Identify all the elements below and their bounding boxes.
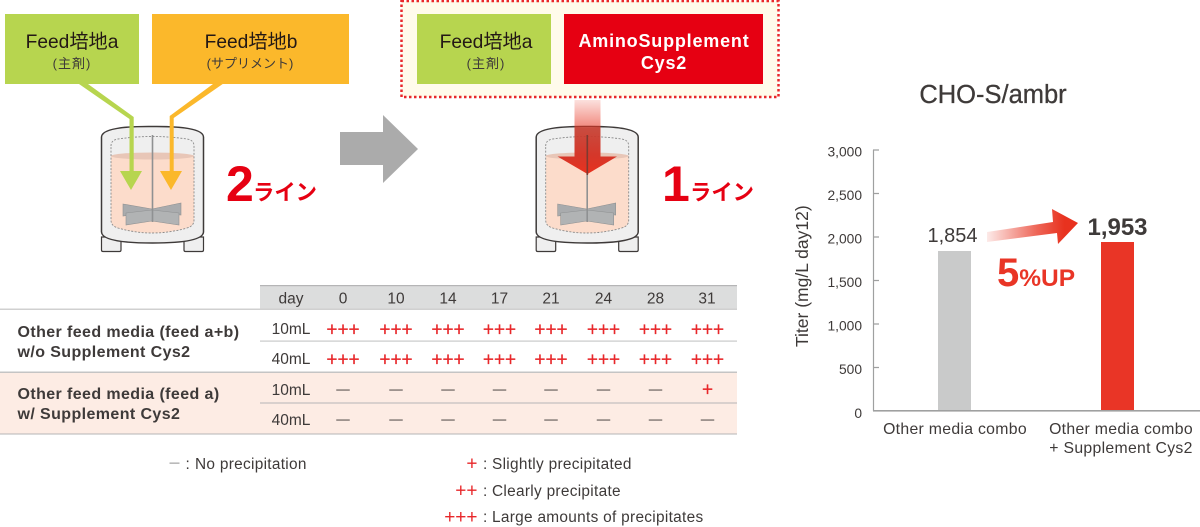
y axis title: Titer (mg/L day12) xyxy=(792,205,812,347)
callout: 5% up: 5%UP xyxy=(997,251,1075,295)
y axis: 1,000 xyxy=(827,318,862,334)
arrow: feed b into tank xyxy=(160,84,223,190)
arrow: increase xyxy=(987,209,1078,244)
row: 40mL with supplement: — xyxy=(336,412,350,426)
legend: slight: : xyxy=(483,456,488,473)
row label: with supplement: w/ Supplement Cys2 xyxy=(16,406,180,423)
table header: 24 xyxy=(595,290,612,308)
row: 40mL with supplement: 40mL xyxy=(272,412,311,429)
box: Feed medium a: Feed培地a xyxy=(440,31,533,53)
x axis xyxy=(873,410,1200,412)
table header: 28 xyxy=(647,290,664,308)
label: 1 line xyxy=(662,156,754,212)
row: 10mL with supplement: + xyxy=(702,380,713,400)
box: Feed medium a: (主剤) xyxy=(53,56,91,71)
row: 40mL with supplement: — xyxy=(597,412,611,426)
row: 10mL with supplement: 10mL xyxy=(272,382,311,399)
bar: other media combo xyxy=(927,225,978,411)
label: 1 line: 1 xyxy=(662,156,690,212)
row label: without supplement: Other feed media (feed a+b) xyxy=(18,324,239,341)
row: 10mL without supplement xyxy=(272,320,724,340)
row: 40mL without supplement xyxy=(272,350,724,370)
row: 40mL without supplement: +++ xyxy=(483,350,516,370)
row: 10mL without supplement: 10mL xyxy=(272,321,311,338)
box: Feed medium a: Feed培地a xyxy=(26,31,119,53)
table header xyxy=(260,285,737,309)
row: 10mL with supplement: — xyxy=(441,382,455,396)
row: 10mL with supplement: — xyxy=(336,382,350,396)
row: 10mL without supplement: +++ xyxy=(326,320,360,340)
row: 40mL without supplement: +++ xyxy=(534,350,568,370)
row label: without supplement: w/o Supplement Cys2 xyxy=(16,344,190,361)
legend: large xyxy=(444,507,703,527)
legend: clear: : xyxy=(483,483,488,500)
table header: 17 xyxy=(491,290,508,308)
row: 10mL with supplement: — xyxy=(493,382,507,396)
row: 40mL with supplement: — xyxy=(389,412,403,426)
row: 40mL with supplement: — xyxy=(649,412,663,426)
row: 10mL without supplement: +++ xyxy=(534,320,568,340)
row: 40mL with supplement: — xyxy=(493,412,507,426)
box: AminoSupplement Cys2: AminoSupplement xyxy=(578,31,750,51)
row label: with supplement: Other feed media (feed a) xyxy=(18,386,220,403)
row: 40mL without supplement: +++ xyxy=(639,350,672,370)
legend: clear: ++ xyxy=(455,480,478,501)
row: 40mL without supplement: +++ xyxy=(431,350,465,370)
row: 40mL without supplement: +++ xyxy=(326,350,360,370)
bar: other media combo: 1,854 xyxy=(927,225,978,247)
legend: large: Large amounts of precipitates xyxy=(492,509,703,526)
arrow: supplement into tank xyxy=(558,100,617,174)
panel: two-line feed diagram xyxy=(5,14,349,252)
legend: clear xyxy=(455,480,621,501)
row: 40mL with supplement: — xyxy=(441,412,455,426)
row: 40mL without supplement: +++ xyxy=(691,350,724,370)
row: 10mL with supplement: — xyxy=(649,382,663,396)
box: Feed medium a: (主剤) xyxy=(467,56,505,71)
icon: bioreactor tank xyxy=(102,126,204,252)
dotted frame xyxy=(402,1,778,97)
chart: CHO-S/ambr titer xyxy=(792,81,1200,457)
row: 40mL with supplement xyxy=(272,412,715,429)
x label 1: Other media combo xyxy=(883,421,1027,438)
table header: 31 xyxy=(698,290,716,308)
box: Feed medium b: Feed培地b xyxy=(205,31,297,53)
box: AminoSupplement Cys2: Cys2 xyxy=(641,53,687,73)
box: Feed medium a xyxy=(5,14,139,84)
chart title: CHO-S/ambr xyxy=(919,81,1067,109)
y axis xyxy=(827,144,879,421)
row: 10mL without supplement: +++ xyxy=(639,320,672,340)
table header: 10 xyxy=(387,290,405,308)
icon: bioreactor tank xyxy=(536,126,638,252)
box: Feed medium b xyxy=(152,14,349,84)
x label 2: + Supplement Cys2 xyxy=(1049,440,1193,457)
row: 10mL with supplement xyxy=(272,380,713,400)
row: 40mL with supplement: — xyxy=(544,412,558,426)
panel: one-line feed diagram xyxy=(402,1,778,252)
legend: clear: Clearly precipitate xyxy=(492,483,621,500)
legend: slight xyxy=(466,454,632,475)
tank shaft over arrow xyxy=(586,135,588,175)
row: 10mL without supplement: +++ xyxy=(431,320,465,340)
arrow: transition gray xyxy=(340,115,418,183)
row: 40mL without supplement: 40mL xyxy=(272,351,311,368)
legend: slight: Slightly precipitated xyxy=(492,456,632,473)
table header: 14 xyxy=(439,290,457,308)
row: 10mL with supplement: — xyxy=(597,382,611,396)
table header: 0 xyxy=(339,290,348,308)
label: 2 lines xyxy=(226,156,317,212)
y axis: 3,000 xyxy=(827,144,862,160)
label: 2 lines: ライン xyxy=(253,180,317,205)
row: 10mL without supplement: +++ xyxy=(587,320,620,340)
row: 10mL without supplement: +++ xyxy=(691,320,724,340)
y axis: 1,500 xyxy=(827,275,862,290)
table: precipitation by day xyxy=(0,285,737,434)
table header: day xyxy=(278,290,304,308)
row: 40mL without supplement: +++ xyxy=(587,350,620,370)
legend: none: : xyxy=(186,456,190,473)
box: Feed medium b: (サプリメント) xyxy=(207,56,293,71)
legend: slight: + xyxy=(466,454,478,475)
arrow: feed a into tank xyxy=(79,84,142,190)
box: Feed medium a xyxy=(417,14,551,84)
row: 10mL without supplement: +++ xyxy=(379,320,413,340)
legend: none: No precipitation xyxy=(195,456,307,473)
x label 2: Other media combo xyxy=(1049,421,1193,438)
legend xyxy=(170,454,703,527)
table header: 21 xyxy=(542,290,560,308)
y axis: 500 xyxy=(839,362,862,377)
y axis: 2,000 xyxy=(827,232,862,246)
bar: with Supplement Cys2 xyxy=(1087,214,1148,411)
y axis: 0 xyxy=(854,406,862,421)
y axis: 2,500 xyxy=(827,188,862,203)
row: 40mL without supplement: +++ xyxy=(379,350,413,370)
label: 1 line: ライン xyxy=(690,180,754,205)
label: 2 lines: 2 xyxy=(226,156,254,212)
row band: with supplement xyxy=(0,372,737,434)
row: 10mL with supplement: — xyxy=(389,382,403,396)
bar: with Supplement Cys2: 1,953 xyxy=(1087,214,1148,241)
row: 10mL without supplement: +++ xyxy=(483,320,516,340)
row: 10mL with supplement: — xyxy=(544,382,558,396)
box: AminoSupplement Cys2 xyxy=(564,14,763,84)
row: 40mL with supplement: — xyxy=(701,412,715,426)
legend: large: : xyxy=(483,509,488,526)
